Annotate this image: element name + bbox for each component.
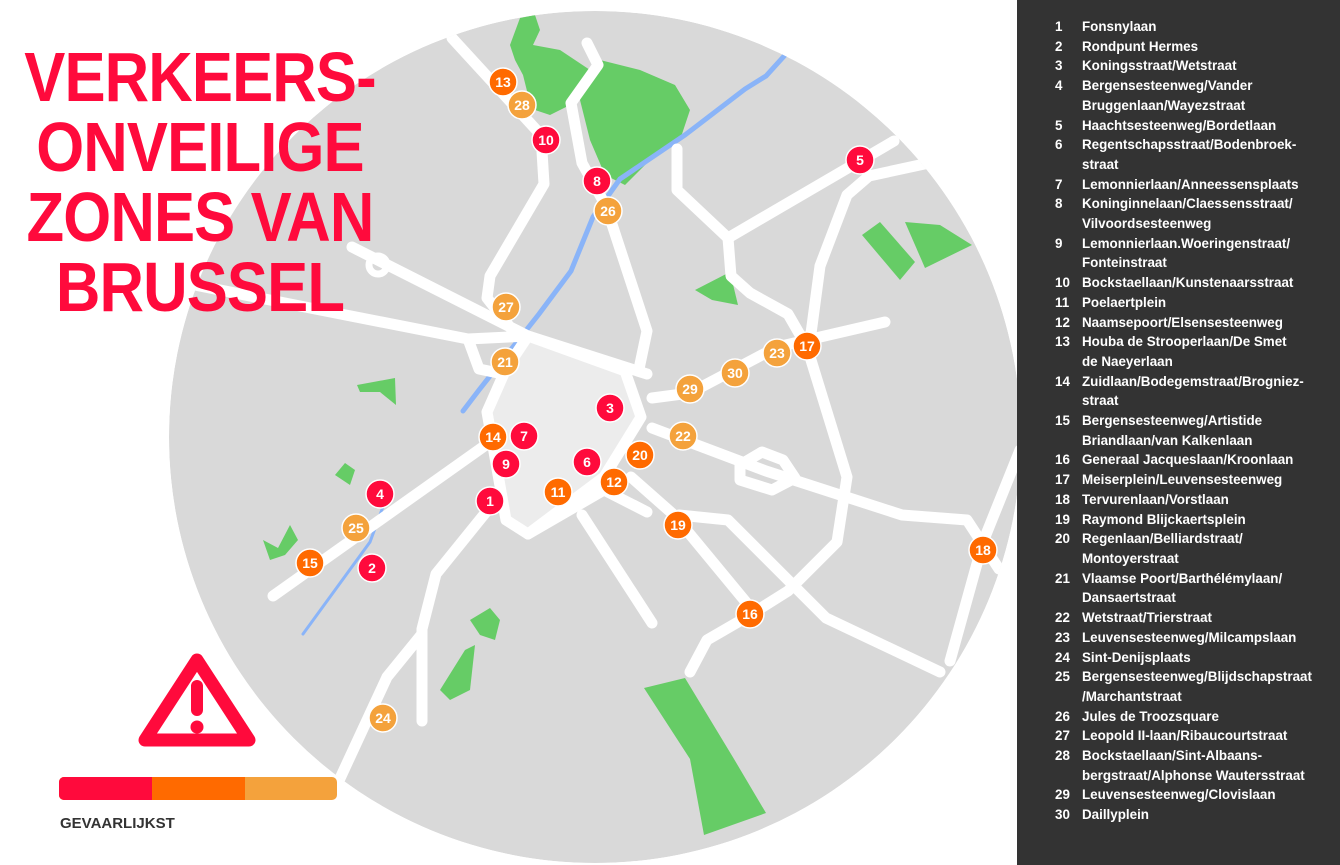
markers: 7 [520,428,528,444]
title: ONVEILIGE [36,108,364,186]
panel: street list: 1 [1055,19,1062,34]
panel: street list: Lemonnierlaan/Anneessensplaats [1082,177,1299,192]
panel: street list: 16 [1055,452,1070,467]
panel: street list: Meiserplein/Leuvensesteenweg [1082,472,1282,487]
markers: 5 [856,152,864,168]
panel: street list: Fonsnylaan [1082,19,1156,34]
panel: street list: 28 [1055,748,1070,763]
panel: street list: 10 [1055,275,1070,290]
legend label: GEVAARLIJKST [60,815,175,832]
panel: street list: Haachtsesteenweg/Bordetlaan [1082,118,1276,133]
roads [170,38,1020,800]
panel: street list: 4 [1055,78,1062,93]
panel: street list: Koninginnelaan/Claessensstraat/ [1082,196,1293,211]
panel: street list [1017,0,1340,865]
markers: 29 [682,381,698,397]
panel: street list: 17 [1055,472,1070,487]
markers: 6 [583,454,591,470]
panel: street list: Houba de Strooperlaan/De Smet [1082,334,1287,349]
markers: 16 [742,606,758,622]
markers: 9 [502,456,510,472]
markers: 27 [498,299,514,315]
markers: 17 [799,338,815,354]
panel: street list: Bruggenlaan/Wayezstraat [1082,98,1245,113]
panel: street list: 24 [1055,650,1070,664]
panel: street list: Dansaertstraat [1082,590,1176,605]
markers: 18 [975,542,991,558]
panel: street list: 2 [1055,39,1062,54]
panel: street list: 6 [1055,137,1062,152]
panel: street list: 7 [1055,177,1062,192]
panel: street list: 11 [1055,295,1069,310]
panel: street list: Daillyplein [1082,807,1149,822]
panel: street list: 29 [1055,787,1070,802]
panel: street list: Rondpunt Hermes [1082,39,1198,54]
panel: street list: 26 [1055,709,1070,724]
panel: street list: 9 [1055,236,1062,251]
markers: 15 [302,555,318,571]
panel: street list: Sint-Denijsplaats [1082,650,1191,664]
panel: street list: 19 [1055,512,1070,527]
panel: street list: 13 [1055,334,1070,349]
markers: 25 [348,520,364,536]
panel: street list: Poelaertplein [1082,295,1166,310]
panel: street list: /Marchantstraat [1082,689,1182,704]
panel: street list: Zuidlaan/Bodegemstraat/Brogniez- [1082,374,1304,389]
markers: 20 [632,447,648,463]
panel: street list: 27 [1055,728,1070,743]
inner ring [487,336,641,534]
panel: street list: Regentschapsstraat/Bodenbroek- [1082,137,1296,152]
panel: street list: Raymond Blijckaertsplein [1082,512,1246,527]
panel: street list: Montoyerstraat [1082,551,1179,566]
panel: street list: 12 [1055,315,1070,330]
panel: street list: Generaal Jacqueslaan/Kroonlaan [1082,452,1293,467]
title: BRUSSEL [56,248,344,326]
panel: street list: 18 [1055,492,1070,507]
panel: street list: 20 [1055,531,1070,546]
panel: street list: bergstraat/Alphonse Wautersstraat [1082,768,1305,783]
panel: street list: Bergensesteenweg/Blijdschapstraat [1082,669,1312,684]
panel: street list: Bockstaellaan/Kunstenaarsstraat [1082,275,1293,290]
markers: 14 [485,429,501,445]
panel: street list: 30 [1055,807,1070,822]
markers: 8 [593,173,601,189]
panel: street list: 21 [1055,571,1070,586]
markers: 19 [670,517,686,533]
title [24,38,376,326]
river [303,22,815,634]
markers: 10 [538,132,554,148]
markers: 30 [727,365,743,381]
panel: street list: straat [1082,393,1118,408]
panel: street list: 15 [1055,413,1070,428]
panel: street list: Jules de Troozsquare [1082,709,1219,724]
panel: street list: 23 [1055,630,1070,645]
panel: street list: 22 [1055,610,1070,625]
panel: street list: Leuvensesteenweg/Clovislaan [1082,787,1276,802]
markers: 23 [769,345,785,361]
markers: 4 [376,486,384,502]
panel: street list: Tervurenlaan/Vorstlaan [1082,492,1229,507]
panel: street list: de Naeyerlaan [1082,354,1173,369]
panel: street list: Vilvoordsesteenweg [1082,216,1211,231]
markers: 13 [495,74,511,90]
panel: street list: Briandlaan/van Kalkenlaan [1082,433,1252,448]
markers: 3 [606,400,614,416]
panel: street list: Fonteinstraat [1082,255,1167,270]
title: VERKEERS- [24,38,376,116]
panel: street list: Lemonnierlaan.Woeringenstraat/ [1082,236,1290,251]
panel: street list: Bergensesteenweg/Artistide [1082,413,1262,428]
markers: 21 [497,354,513,370]
panel: street list: straat [1082,157,1118,172]
legend bar [59,777,337,800]
panel: street list: 8 [1055,196,1062,211]
markers: 12 [606,474,622,490]
icon: warning triangle [145,660,249,740]
panel: street list: Wetstraat/Trierstraat [1082,610,1212,625]
parks [263,15,972,835]
title: ZONES VAN [27,178,373,256]
map circle [169,11,1021,863]
markers: 2 [368,560,376,576]
panel: street list: 5 [1055,118,1062,133]
panel: street list: Naamsepoort/Elsensesteenweg [1082,315,1283,330]
markers: 22 [675,428,691,444]
markers: 26 [600,203,616,219]
panel: street list: 3 [1055,58,1062,73]
panel: street list: Vlaamse Poort/Barthélémylaan/ [1082,571,1282,586]
markers: 1 [486,493,494,509]
panel: street list: Leuvensesteenweg/Milcampslaan [1082,630,1296,645]
panel: street list: 25 [1055,669,1070,684]
panel: street list: Leopold II-laan/Ribaucourtstraat [1082,728,1287,743]
map [59,11,1017,863]
panel: street list: Koningsstraat/Wetstraat [1082,58,1237,73]
panel: street list: Bockstaellaan/Sint-Albaans- [1082,748,1262,763]
markers: 24 [375,710,391,726]
panel: street list: Bergensesteenweg/Vander [1082,78,1252,93]
markers: 28 [514,97,530,113]
panel: street list: Regenlaan/Belliardstraat/ [1082,531,1243,546]
markers [296,68,997,732]
panel: street list: 14 [1055,374,1070,389]
markers: 11 [551,484,566,500]
